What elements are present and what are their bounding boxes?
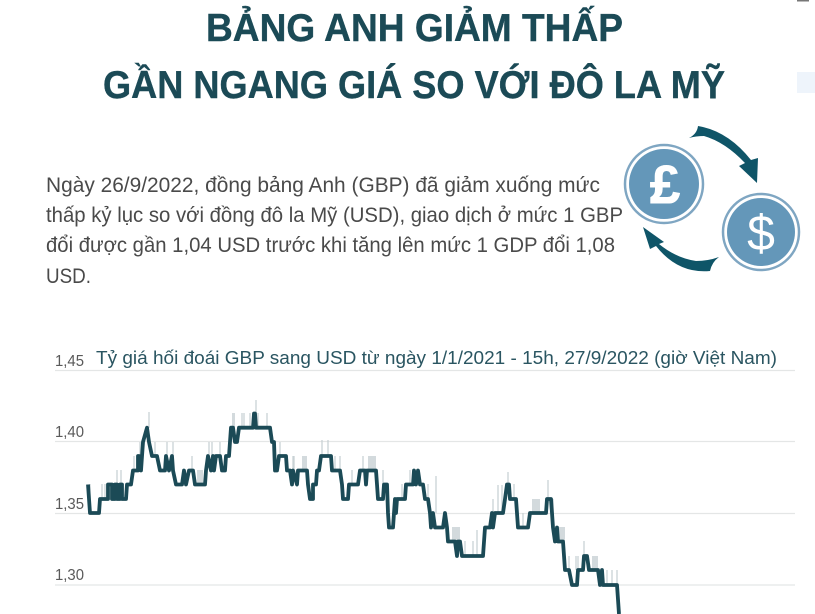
y axis labels: 1,30 — [55, 567, 84, 584]
icon: pound coin — [625, 145, 703, 223]
intro text block: Ngày 26/9/2022, đồng bảng Anh (GBP) đã giảm xuống mức — [46, 174, 600, 197]
y axis labels: 1,35 — [55, 496, 84, 513]
corner marker — [797, 72, 815, 93]
icon: pound coin: £ — [650, 155, 680, 215]
chart: GBP to USD exchange rate — [55, 347, 795, 614]
y axis labels — [55, 353, 84, 584]
icon: dollar coin: $ — [747, 205, 775, 261]
intro text block — [46, 174, 623, 288]
title: GẦN NGANG GIÁ SO VỚI ĐÔ LA MỸ — [103, 62, 725, 107]
y axis labels: 1,40 — [55, 424, 84, 441]
intro text block: thấp kỷ lục so với đồng đô la Mỹ (USD), giao dịch ở mức 1 GBP — [46, 204, 623, 227]
title: BẢNG ANH GIẢM THẤP — [206, 6, 623, 50]
arrow: pound to dollar — [689, 126, 758, 183]
price line — [88, 414, 619, 614]
icon: dollar coin — [723, 194, 799, 270]
intro text block: đổi được gần 1,04 USD trước khi tăng lên mức 1 GDP đổi 1,08 — [46, 234, 615, 257]
chart title: Tỷ giá hối đoái GBP sang USD từ ngày 1/1/2021 - 15h, 27/9/2022 (giờ Việt Nam) — [96, 347, 777, 368]
icon: currency exchange — [625, 126, 799, 271]
y axis labels: 1,45 — [55, 353, 84, 370]
intro text block: USD. — [46, 265, 91, 288]
arrow: dollar to pound — [643, 227, 719, 271]
high-low range spikes — [90, 400, 617, 585]
title — [103, 6, 725, 107]
